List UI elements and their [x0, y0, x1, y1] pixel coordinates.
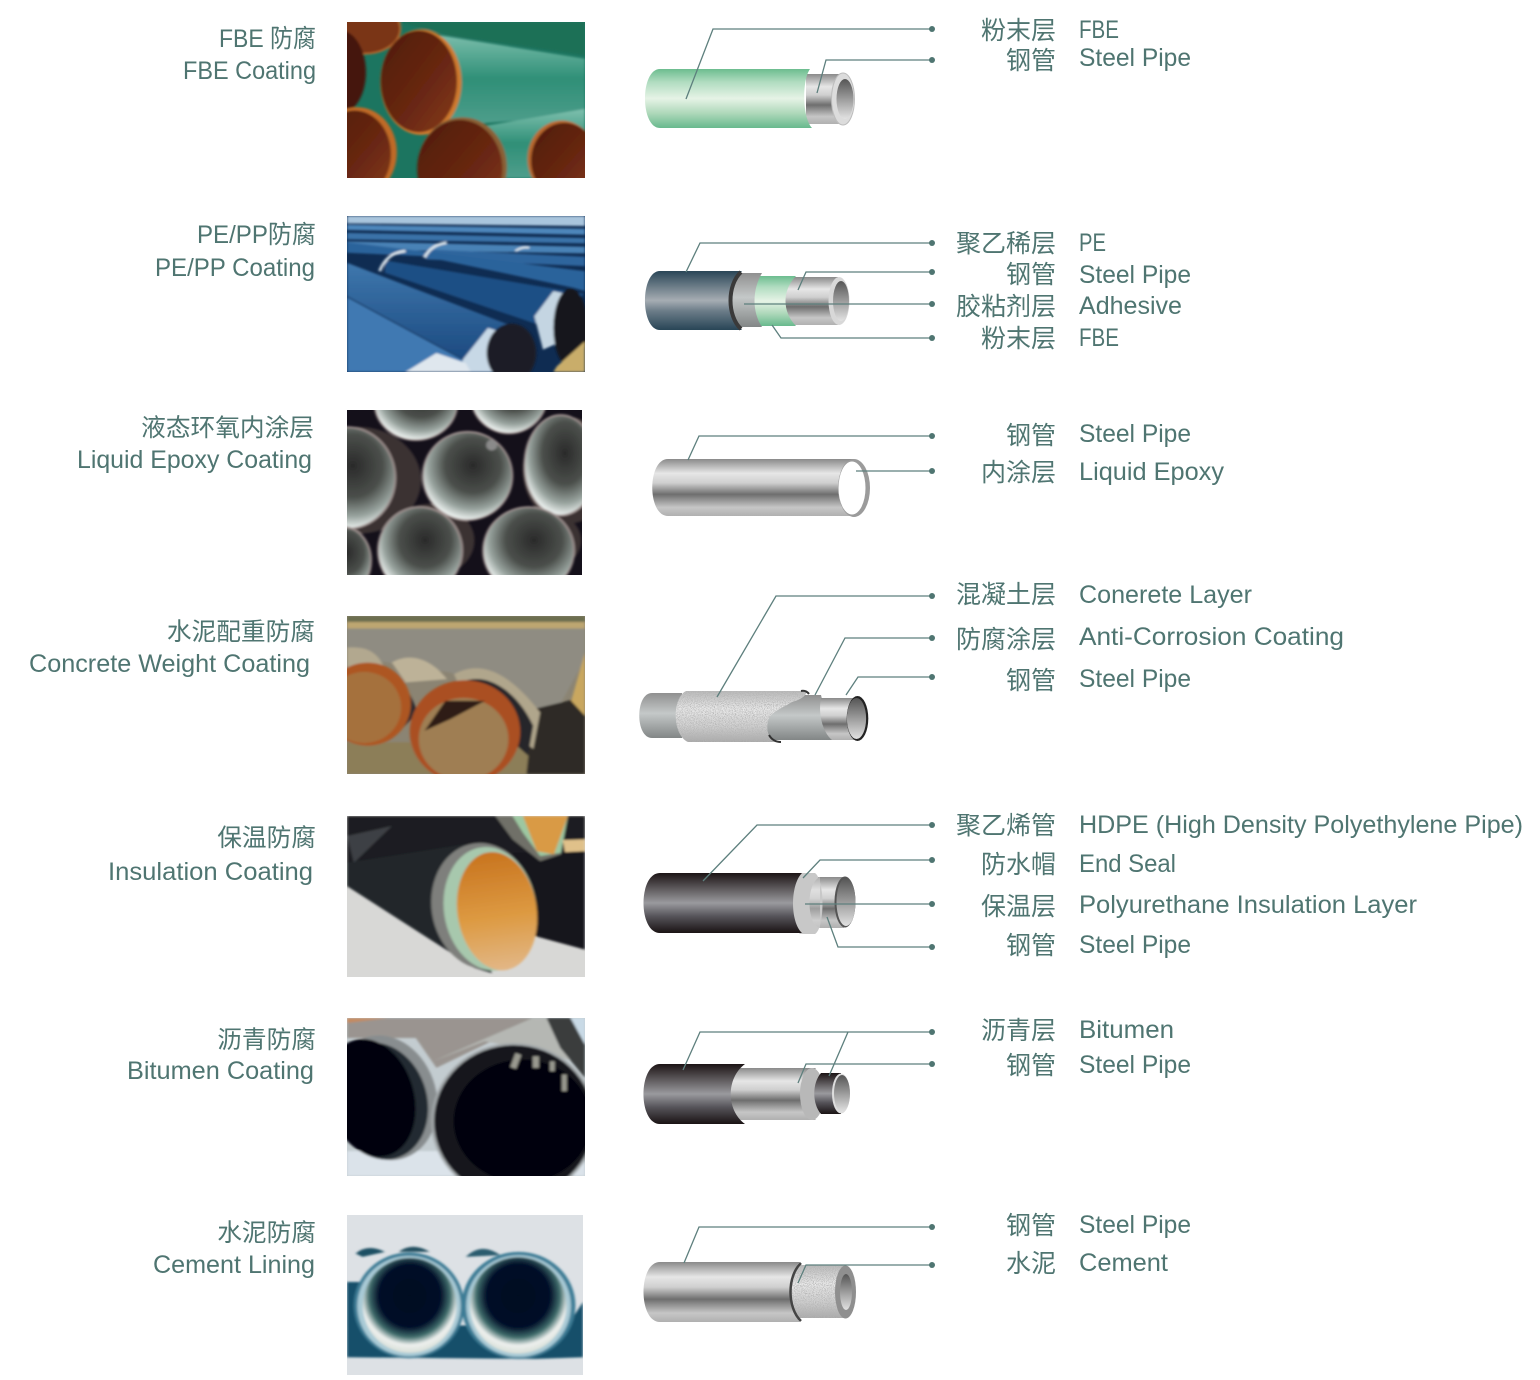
photo: green FBE pipes — [347, 22, 585, 178]
heading: insulation coating: Insulation Coating — [108, 858, 313, 886]
labels: 沥青层 — [981, 1017, 1056, 1045]
labels: PE — [1079, 229, 1106, 257]
heading: FBE coating — [183, 25, 316, 85]
photo: blue coated pipes — [347, 216, 585, 372]
labels: 粉末层 — [981, 325, 1056, 353]
labels: 聚乙稀层 — [956, 230, 1056, 258]
pipe diagram: HDPE, end seal, insulation, steel — [644, 873, 856, 934]
heading: FBE coating: FBE Coating — [183, 57, 316, 85]
labels: 钢管 — [1006, 667, 1056, 695]
row: FBE coating — [183, 4, 1191, 218]
heading: insulation coating — [108, 824, 316, 886]
heading: PE/PP coating — [155, 221, 316, 282]
labels: Steel Pipe — [1079, 1211, 1191, 1239]
pipe diagram: steel with cement lining — [644, 1262, 856, 1322]
labels: 粉末层 — [981, 17, 1056, 45]
pipe diagram: FBE over steel — [645, 69, 854, 128]
labels: End Seal — [1079, 850, 1176, 878]
labels — [981, 16, 1191, 75]
labels: 聚乙烯管 — [956, 812, 1056, 840]
labels: Conerete Layer — [1079, 581, 1252, 609]
labels: 内涂层 — [981, 459, 1056, 487]
heading: bitumen coating: Bitumen Coating — [127, 1057, 314, 1085]
pipe diagram: concrete, anti-corrosion, steel — [639, 691, 868, 742]
labels — [956, 811, 1523, 960]
labels: Steel Pipe — [1079, 1051, 1191, 1079]
leader lines — [683, 1029, 935, 1083]
labels: 防水帽 — [981, 851, 1056, 879]
heading: FBE coating: FBE 防腐 — [219, 25, 316, 53]
labels: FBE — [1079, 324, 1119, 352]
leader lines — [717, 593, 935, 697]
heading: cement lining: Cement Lining — [153, 1251, 315, 1279]
row: insulation coating — [108, 811, 1523, 977]
labels: Anti-Corrosion Coating — [1079, 623, 1344, 651]
labels: FBE — [1079, 16, 1119, 44]
labels — [1006, 1211, 1191, 1278]
labels: 钢管 — [1006, 422, 1056, 450]
row: bitumen coating — [127, 1016, 1191, 1199]
row: concrete weight coating — [29, 581, 1344, 783]
labels: Bitumen — [1079, 1016, 1174, 1044]
heading: concrete weight coating: 水泥配重防腐 — [167, 618, 315, 646]
labels: Steel Pipe — [1079, 665, 1191, 693]
labels: Adhesive — [1079, 292, 1182, 320]
heading: PE/PP coating: PE/PP防腐 — [197, 221, 316, 249]
labels: 钢管 — [1006, 932, 1056, 960]
labels: Cement — [1079, 1249, 1168, 1277]
labels: 混凝土层 — [956, 581, 1056, 609]
labels: 防腐涂层 — [956, 626, 1056, 654]
heading: bitumen coating: 沥青防腐 — [217, 1026, 316, 1054]
labels: 钢管 — [1006, 47, 1056, 75]
leader lines — [686, 26, 935, 99]
photo: cement lined pipe ends — [347, 1215, 583, 1375]
heading: concrete weight coating — [29, 618, 315, 678]
pipe diagram: PE, adhesive, FBE, steel — [645, 271, 850, 330]
labels: HDPE (High Density Polyethylene Pipe) — [1079, 811, 1523, 839]
photo: epoxy lined pipe ends — [347, 410, 582, 575]
photo: bitumen lined pipe ends — [347, 1018, 585, 1176]
heading: PE/PP coating: PE/PP Coating — [155, 254, 315, 282]
labels: 保温层 — [981, 893, 1056, 921]
labels: Polyurethane Insulation Layer — [1079, 891, 1417, 919]
labels: 钢管 — [1006, 1212, 1056, 1240]
labels: 钢管 — [1006, 1052, 1056, 1080]
pipe diagram: steel with inner coat — [652, 459, 870, 517]
labels — [956, 229, 1191, 353]
labels: 胶粘剂层 — [956, 293, 1056, 321]
heading: bitumen coating — [127, 1026, 316, 1085]
row: PE/PP coating — [155, 216, 1191, 382]
leader lines — [703, 822, 935, 950]
labels: Steel Pipe — [1079, 420, 1191, 448]
labels — [981, 420, 1225, 487]
leader lines — [688, 433, 935, 474]
labels: 水泥 — [1006, 1250, 1056, 1278]
labels: Steel Pipe — [1079, 931, 1191, 959]
labels: Steel Pipe — [1079, 44, 1191, 72]
heading: liquid epoxy coating: Liquid Epoxy Coating — [77, 446, 312, 474]
labels: Steel Pipe — [1079, 261, 1191, 289]
heading: liquid epoxy coating — [77, 414, 314, 474]
labels — [956, 581, 1344, 695]
labels: 钢管 — [1006, 261, 1056, 289]
leader lines — [686, 240, 935, 341]
row: cement lining — [153, 1211, 1191, 1375]
labels: Liquid Epoxy — [1079, 458, 1225, 486]
photo: black insulated pipes with orange lining — [347, 816, 585, 977]
heading: cement lining: 水泥防腐 — [217, 1219, 316, 1247]
pipe diagram: bitumen over steel — [644, 1064, 850, 1124]
labels — [981, 1016, 1191, 1080]
heading: concrete weight coating: Concrete Weight Coating — [29, 650, 310, 678]
leader lines — [684, 1224, 935, 1283]
photo: concrete coated pipes — [347, 616, 585, 774]
heading: cement lining — [153, 1219, 316, 1279]
row: liquid epoxy coating — [77, 360, 1225, 594]
heading: insulation coating: 保温防腐 — [217, 824, 316, 852]
heading: liquid epoxy coating: 液态环氧内涂层 — [141, 414, 314, 442]
